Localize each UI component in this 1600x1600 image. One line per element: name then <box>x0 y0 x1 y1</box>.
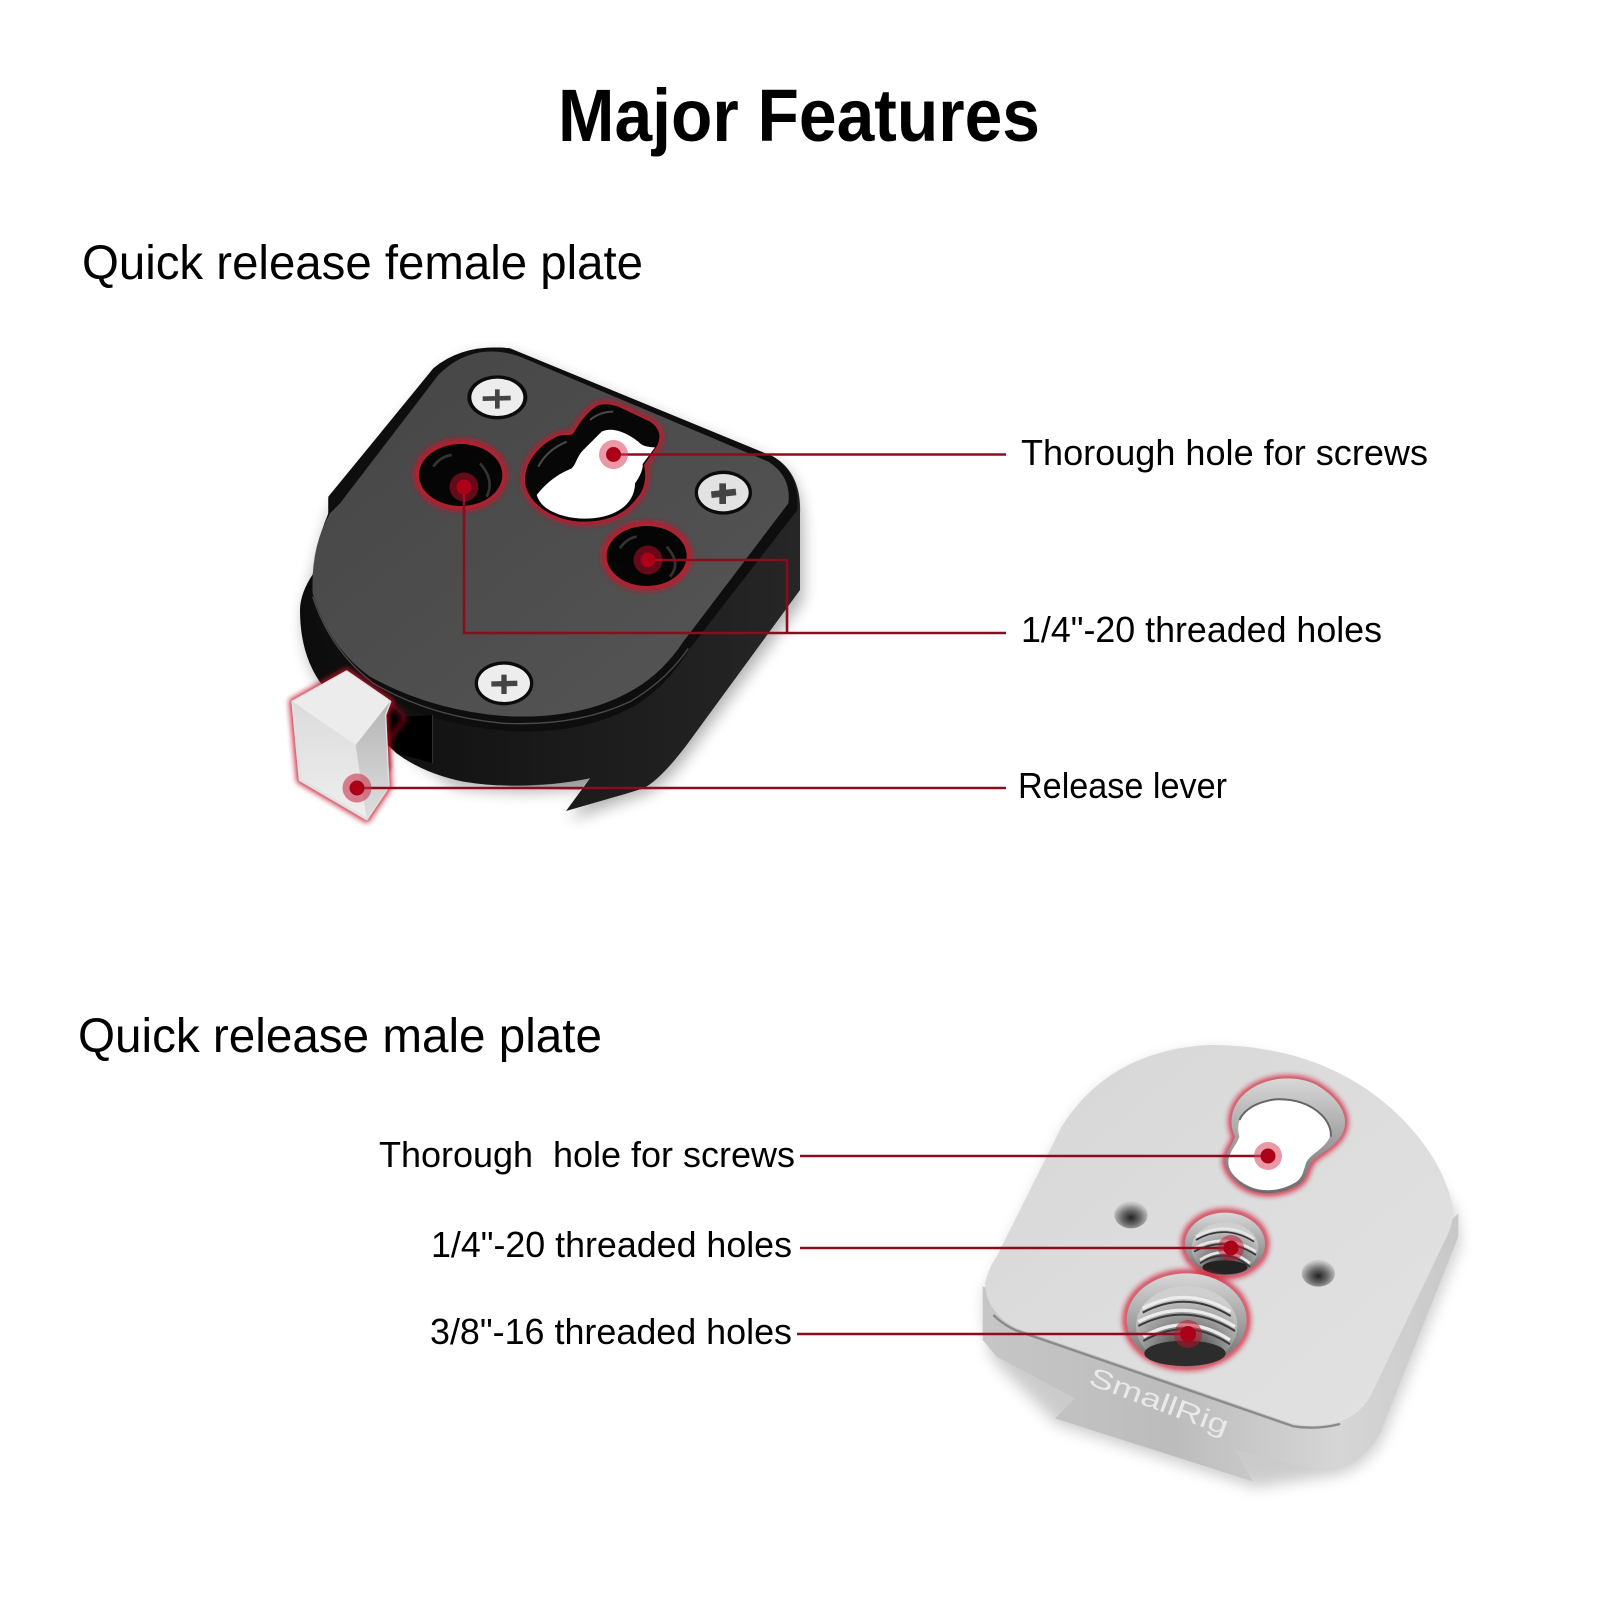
heading: female plate: Quick release female plate <box>82 237 643 290</box>
label: female through hole: Thorough hole for screws <box>1021 432 1428 473</box>
three-eighths threaded hole <box>1126 1273 1247 1367</box>
title: Major Features <box>558 74 1040 157</box>
screw top right <box>695 471 752 515</box>
callout: male through hole <box>800 1142 1282 1170</box>
screw top left <box>467 375 527 419</box>
threaded hole left <box>418 443 504 507</box>
callout: male quarter-inch holes <box>800 1235 1244 1261</box>
threaded hole right <box>605 525 688 587</box>
screw bottom <box>475 661 533 705</box>
rim highlight <box>313 597 688 724</box>
lever slot <box>385 703 433 763</box>
label: female threaded holes: 1/4"-20 threaded holes <box>1021 609 1382 650</box>
label: male quarter-inch holes: 1/4"-20 threaded holes <box>431 1224 792 1265</box>
label: male three-eighths holes: 3/8"-16 threaded holes <box>430 1311 792 1352</box>
female plate rim <box>312 347 798 732</box>
callout: female through hole <box>599 440 1006 469</box>
male plate product image <box>983 1045 1460 1488</box>
quarter-inch threaded hole <box>1184 1212 1266 1276</box>
dovetail highlight <box>497 778 590 790</box>
keyhole through hole <box>525 404 659 522</box>
callout: release lever <box>342 774 1006 802</box>
callout: female threaded holes <box>450 472 1006 633</box>
female plate body <box>300 347 800 811</box>
heading: male plate: Quick release male plate <box>78 1010 602 1063</box>
keyhole through hole <box>1225 1078 1345 1193</box>
male plate body and dovetail tab <box>983 1213 1458 1482</box>
female plate product image <box>293 347 803 820</box>
top face edge <box>993 1315 1340 1428</box>
release lever <box>293 672 405 819</box>
logo: SmallRig <box>1085 1362 1233 1441</box>
small hole left <box>1114 1202 1148 1228</box>
label: release lever: Release lever <box>1018 765 1227 806</box>
small hole right <box>1302 1260 1335 1287</box>
female plate top face <box>312 352 789 717</box>
label: male through hole: Thorough hole for screws <box>379 1134 795 1175</box>
male plate top face <box>985 1045 1453 1426</box>
callout: male three-eighths holes <box>797 1320 1202 1348</box>
